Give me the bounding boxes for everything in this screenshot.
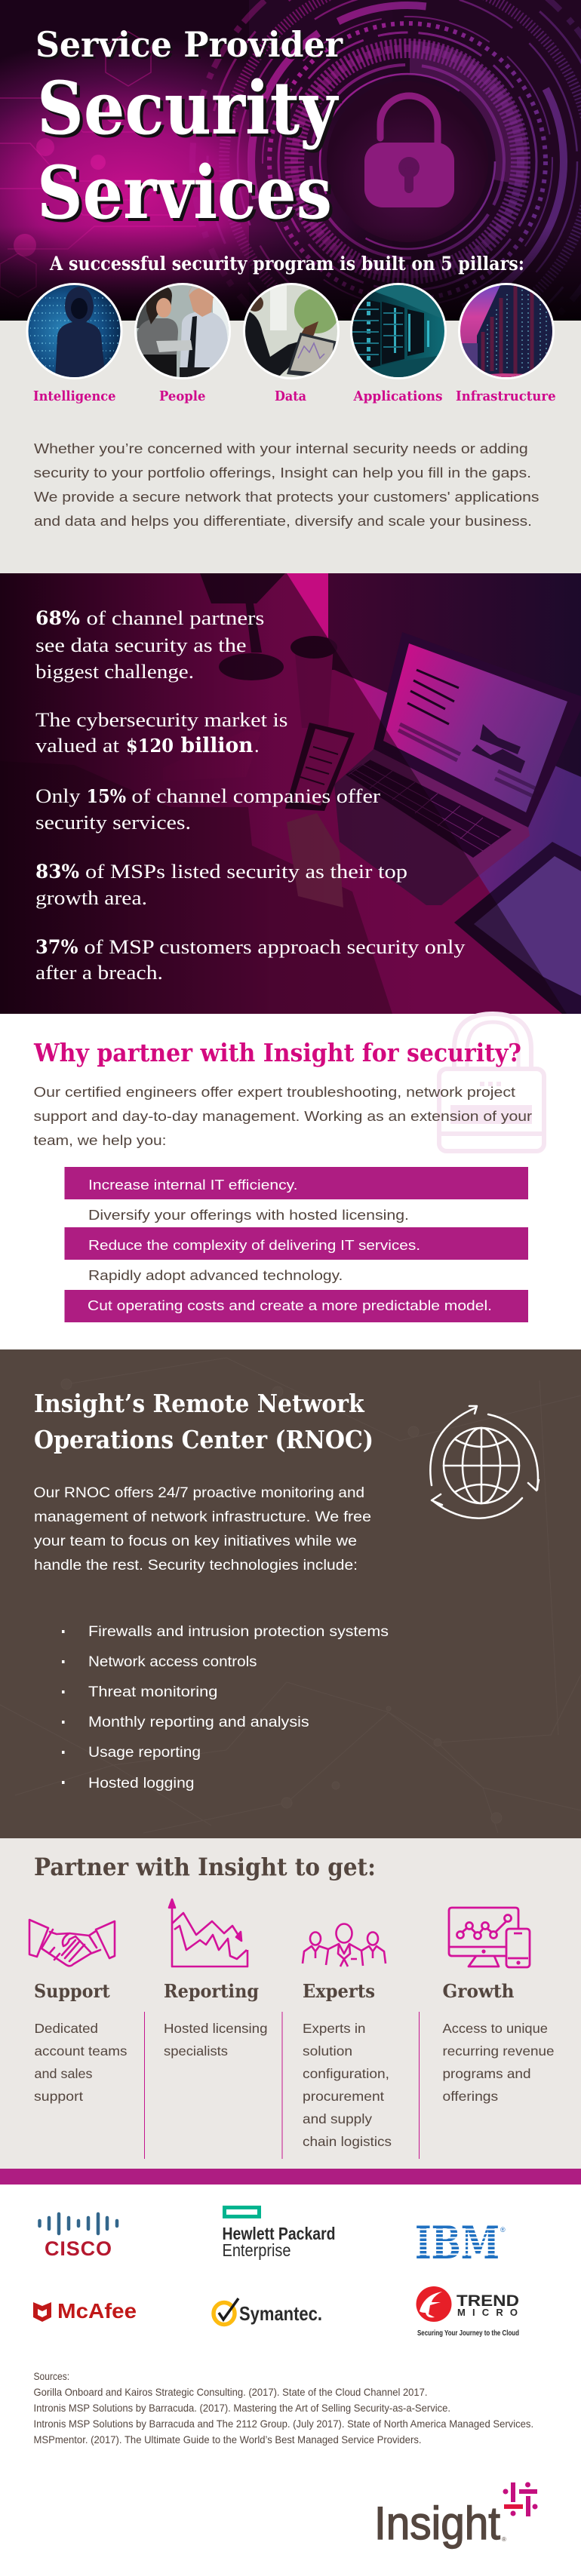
bar: internal efficiency: Increase internal IT efficiency. <box>88 1177 297 1193</box>
column: experts: and supply <box>303 2111 372 2126</box>
panel: statistics <box>0 573 581 1014</box>
paragraph <box>33 1485 371 1574</box>
panel: hero <box>0 0 581 321</box>
logo: Hewlett Packard Enterprise: Hewlett Packard <box>222 2224 335 2243</box>
heading: Why partner with Insight for security? <box>33 1038 521 1067</box>
row: hosted licensing: Diversify your offerings with hosted licensing. <box>88 1207 409 1223</box>
column: support <box>34 1980 128 2104</box>
stat: 37%: after a breach. <box>35 962 163 984</box>
stat: 83% <box>35 861 407 909</box>
column: growth: Access to unique <box>442 2021 548 2036</box>
bar: reduce complexity: Reduce the complexity of delivering IT services. <box>88 1237 420 1253</box>
column: experts: configuration, <box>303 2066 389 2081</box>
bullet list: Monthly reporting and analysis <box>88 1715 309 1730</box>
body text: Our certified engineers offer expert troubleshooting, network project <box>33 1084 515 1100</box>
column: experts: chain logistics <box>303 2134 392 2149</box>
column: experts: solution <box>303 2043 352 2059</box>
column: support: Dedicated <box>35 2021 98 2036</box>
logo: IBM: IBM <box>415 2217 500 2270</box>
stat: 15%: 15% <box>86 785 126 807</box>
title: Services: Services <box>37 150 332 235</box>
pillar photo: applications <box>350 283 447 379</box>
heading <box>34 1389 374 1454</box>
panel: RNOC <box>0 1349 581 1838</box>
bar: cut costs: Cut operating costs and create a more predictable model. <box>88 1297 492 1313</box>
icon: handshake <box>29 1920 115 1966</box>
second laptop <box>454 842 581 1014</box>
sources: Sources: <box>33 2370 69 2382</box>
paragraph: management of network infrastructure. We free <box>34 1509 371 1525</box>
pillar photo: intelligence <box>26 283 123 379</box>
intro paragraph: security to your portfolio offerings, Insight can help you fill in the gaps. <box>33 465 531 481</box>
pillar labels: People <box>159 388 205 404</box>
bullet list: Hosted logging <box>88 1776 195 1792</box>
bullet list: Network access controls <box>88 1654 257 1670</box>
pillar photo: people <box>134 283 231 379</box>
logo: Trend Micro: MICRO <box>457 2307 518 2318</box>
magenta divider band <box>0 2169 581 2185</box>
logo: Trend Micro: TREND <box>456 2292 519 2310</box>
stat: 37% <box>35 936 465 984</box>
bar: cut costs <box>65 1290 528 1322</box>
bullet list: Firewalls and intrusion protection systems <box>88 1624 389 1640</box>
arm and sweater <box>57 764 392 1014</box>
logo: Trend Micro: Securing Your Journey to the Cloud <box>417 2329 519 2338</box>
column: reporting: Hosted licensing <box>164 2021 267 2036</box>
stat: $120 billion: billion <box>181 734 254 757</box>
laptop <box>374 632 581 827</box>
icon: watermark lock <box>439 1014 544 1151</box>
paragraph: your team to focus on key initiatives while we <box>34 1534 357 1549</box>
heading: Insight’s Remote Network <box>34 1389 365 1418</box>
subtitle: 5 pillars: A successful security program is built on 5 pillars: <box>49 253 524 275</box>
column: reporting <box>164 1980 267 2059</box>
panel: why partner <box>33 1014 544 1322</box>
column: support: and sales <box>35 2066 93 2081</box>
column: support: support <box>34 2089 83 2104</box>
intro paragraph: We provide a secure network that protects your customers' applications <box>34 489 539 505</box>
intro paragraph: Whether you’re concerned with your internal security needs or adding <box>34 441 528 456</box>
cup <box>295 653 334 728</box>
stat: 15%: security services. <box>35 812 191 834</box>
bar: reduce complexity <box>65 1227 528 1260</box>
body text: support and day-to-day management. Working as an extension of your <box>33 1108 532 1124</box>
title: Security: Security <box>37 66 340 151</box>
column: reporting: specialists <box>164 2043 228 2059</box>
stat: 83%: growth area. <box>35 887 147 909</box>
dark diagonal shade <box>0 573 567 1014</box>
icon: chart <box>169 1899 247 1967</box>
stat: 37%: 37% <box>35 936 78 958</box>
stat: 68%: 68% <box>35 607 80 629</box>
logo: Insight: Insight <box>374 2498 500 2549</box>
logo: Cisco <box>39 2214 117 2260</box>
pillar labels: Applications <box>353 388 442 404</box>
bullet list: Usage reporting <box>88 1745 201 1761</box>
stat: 15% <box>35 785 380 834</box>
stat: $120 billion: The cybersecurity market is <box>35 709 288 731</box>
pillar labels: Data <box>275 388 306 404</box>
pillar labels <box>33 388 556 404</box>
stat: 68%: biggest challenge. <box>35 661 194 683</box>
sources: Intronis MSP Solutions by Barracuda. (2017). Mastering the Art of Selling Security-as-a-Service. <box>33 2402 450 2414</box>
icon: padlock <box>364 96 454 207</box>
body text: team, we help you: <box>33 1132 166 1148</box>
stat: 68%: of channel partners <box>86 607 264 629</box>
logo: Symantec <box>214 2298 322 2325</box>
stat: $120 billion: valued at <box>35 735 120 757</box>
stat: 37%: of MSP customers approach security only <box>85 936 465 958</box>
network texture <box>0 1358 581 1833</box>
stat: $120 billion: . <box>254 735 260 757</box>
paragraph: Our RNOC offers 24/7 proactive monitoring and <box>33 1485 364 1501</box>
lamp <box>200 573 285 603</box>
stat: $120 billion: $120 <box>126 735 174 757</box>
column: growth: programs and <box>442 2066 531 2081</box>
logo: Trend Micro <box>417 2286 519 2338</box>
desk photo background <box>0 573 581 1014</box>
title: Service Provider: Service Provider <box>35 24 343 65</box>
stat: 83%: of MSPs listed security as their top <box>85 861 407 883</box>
phone and notebook <box>163 730 261 781</box>
column: growth <box>442 1980 554 2104</box>
column: support: account teams <box>35 2043 128 2059</box>
column: growth: recurring revenue <box>442 2043 554 2059</box>
column: experts: Experts in <box>303 2021 365 2036</box>
benefit list <box>65 1167 528 1322</box>
column: reporting: Reporting <box>164 1980 259 2002</box>
bar: internal efficiency <box>65 1167 528 1199</box>
icon: Insight mark <box>503 2482 537 2516</box>
logo: Insight <box>374 2482 537 2549</box>
stat: 83%: 83% <box>35 861 79 883</box>
column: growth: offerings <box>442 2089 498 2104</box>
intro paragraph <box>33 441 539 529</box>
column: support: Support <box>34 1980 110 2002</box>
pillar labels: Intelligence <box>33 388 116 404</box>
sources: Intronis MSP Solutions by Barracuda and The 2112 Group. (July 2017). State of North America Managed Services. <box>33 2418 533 2430</box>
icon: globe with arrows <box>430 1406 539 1518</box>
intro paragraph: and data and helps you differentiate, diversify and scale your business. <box>34 513 532 529</box>
column: growth: Growth <box>442 1980 515 2002</box>
bullet list <box>62 1624 389 1792</box>
logo: Hewlett Packard Enterprise <box>222 2207 335 2260</box>
stat: 15%: Only <box>35 785 80 807</box>
stat: 68% <box>35 607 264 683</box>
column: experts: Experts <box>303 1980 375 2002</box>
body text <box>33 1084 532 1148</box>
stat: 68%: see data security as the <box>35 634 246 656</box>
paragraph: handle the rest. Security technologies include: <box>34 1558 358 1574</box>
stat: $120 billion <box>35 709 288 757</box>
logo: Symantec: Symantec. <box>239 2302 322 2325</box>
heading: Operations Center (RNOC) <box>34 1425 374 1454</box>
stat: 15%: of channel companies offer <box>131 785 380 807</box>
logo: Cisco: CISCO <box>45 2237 112 2260</box>
sources: Gorilla Onboard and Kairos Strategic Consulting. (2017). State of the Cloud Channel 2017. <box>33 2386 427 2398</box>
panel: partner benefits <box>29 1853 554 2159</box>
row: adopt technology: Rapidly adopt advanced technology. <box>88 1267 343 1283</box>
sources <box>33 2370 533 2446</box>
column: experts <box>303 1980 392 2149</box>
pillar photo: infrastructure <box>458 283 555 379</box>
column: experts: procurement <box>303 2089 384 2104</box>
heading: Partner with Insight to get: <box>34 1853 376 1881</box>
logo: McAfee: McAfee <box>57 2299 137 2323</box>
logo: Insight: ® <box>502 2536 506 2543</box>
pillar photo: data <box>243 283 340 379</box>
icon: devices <box>449 1908 530 1967</box>
bullet list: Threat monitoring <box>88 1684 217 1700</box>
sources: MSPmentor. (2017). The Ultimate Guide to the World’s Best Managed Service Providers. <box>33 2433 421 2446</box>
logo: IBM: ® <box>500 2226 506 2234</box>
hero background with digital lock rings <box>0 0 581 321</box>
icon: experts <box>303 1924 386 1967</box>
logo: Hewlett Packard Enterprise: Enterprise <box>222 2240 291 2260</box>
pillar labels: Infrastructure <box>456 388 556 404</box>
